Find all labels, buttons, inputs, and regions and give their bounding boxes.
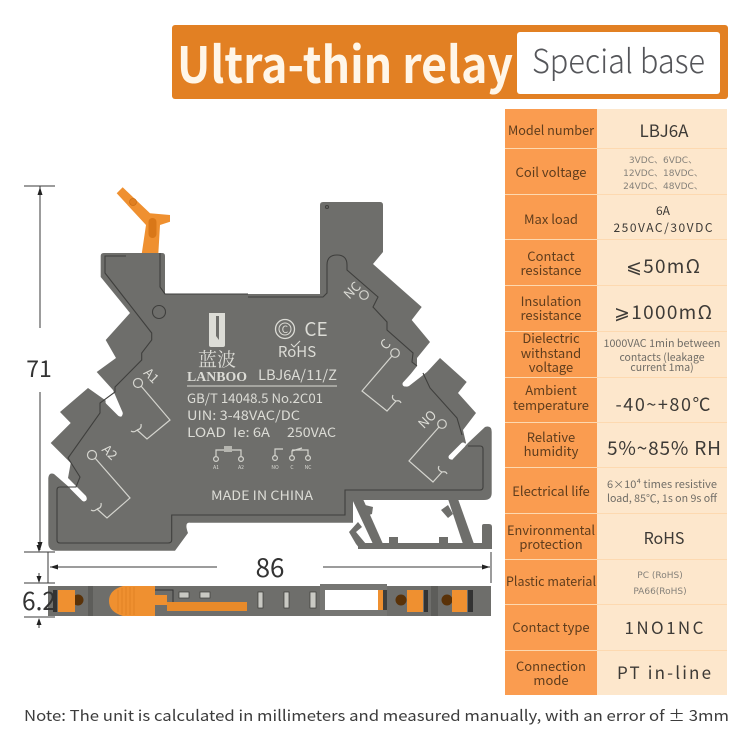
row: max load: Max load	[524, 209, 578, 228]
row: model number: LBJ6A	[640, 117, 689, 142]
brand logo	[187, 313, 247, 385]
made in china: MADE IN CHINA	[211, 485, 313, 504]
orange handle and slider	[109, 586, 247, 616]
contact wiring A1: A1	[140, 363, 164, 387]
dimension: height 71: 71	[26, 350, 52, 384]
subtitle box: Special base	[532, 35, 705, 83]
contact wiring A2	[88, 440, 130, 518]
title: Ultra-thin relay	[177, 26, 513, 98]
row: connection mode: Connection	[516, 656, 586, 675]
row: max load	[524, 202, 713, 236]
row: connection mode	[516, 656, 711, 689]
contact wiring A1	[131, 363, 170, 439]
row: contact resistance: ⩽50mΩ	[626, 252, 700, 279]
internal seam lines	[57, 206, 483, 543]
row: relative humidity: humidity	[524, 441, 579, 460]
coil schematic	[213, 446, 244, 471]
row: connection mode: mode	[533, 670, 569, 689]
row: insulation resistance: Insulation	[521, 291, 581, 310]
row: plastic material: PC (RoHS)	[637, 571, 683, 581]
row: model number	[508, 117, 689, 142]
row: environmental protection: Environmental	[507, 520, 595, 539]
right terminal 2	[442, 590, 473, 612]
dimension: thickness 6.2: 6.2	[22, 582, 56, 618]
row: contact type: Contact type	[512, 617, 590, 636]
certification marks	[276, 315, 328, 362]
row: contact resistance	[521, 246, 700, 279]
row: contact resistance: Contact	[527, 246, 575, 265]
contact schematic: NO	[271, 464, 279, 471]
row: model number: Model number	[508, 120, 595, 139]
header banner	[172, 25, 728, 99]
contact NO: NO	[413, 405, 440, 432]
contact wiring A2: A2	[98, 440, 122, 464]
row: dielectric withstand voltage: 1000VAC 1min between	[604, 336, 720, 351]
footnote: Note: The unit is calculated in millimeters and measured manually, with an error of ± 3mm	[24, 705, 729, 726]
row: dielectric withstand voltage	[521, 328, 720, 376]
row: plastic material: PA66(RoHS)	[633, 587, 687, 597]
certification marks: CE	[304, 315, 328, 342]
right terminal 1	[396, 590, 428, 612]
contact schematic: C	[290, 464, 294, 471]
row: insulation resistance: resistance	[521, 305, 581, 324]
certification marks: RoHS	[278, 341, 316, 362]
specification text: UIN: 3-48VAC/DC	[187, 405, 300, 424]
label window	[320, 584, 387, 616]
row: dielectric withstand voltage: Dielectric	[522, 328, 580, 347]
specification text: GB/T 14048.5 No.2C01	[187, 388, 323, 407]
row: electrical life: 6×10⁴ times resistive	[607, 477, 717, 492]
row: max load: 250VAC/30VDC	[614, 219, 713, 236]
row: ambient temperature: -40~+80℃	[616, 391, 710, 417]
row: dielectric withstand voltage: voltage	[529, 357, 573, 376]
contact C	[362, 334, 401, 411]
row: dielectric withstand voltage: contacts (leakage	[619, 350, 705, 365]
row: ambient temperature	[513, 380, 710, 417]
base body	[48, 202, 492, 551]
model number marking: LBJ6A/11/Z	[258, 365, 337, 385]
coil schematic: A1	[213, 464, 219, 471]
row: coil voltage: 24VDC、48VDC、	[623, 182, 703, 192]
contact NC: NC	[339, 277, 365, 303]
row: insulation resistance: ⩾1000mΩ	[614, 298, 712, 325]
row: electrical life	[512, 477, 718, 506]
relay base top view strip	[48, 584, 491, 616]
row: plastic material: Plastic material	[506, 571, 596, 590]
left terminal	[53, 590, 84, 612]
row: relative humidity: Relative	[527, 427, 575, 446]
row: plastic material	[506, 571, 687, 597]
underline	[187, 385, 337, 387]
small windows	[179, 592, 316, 608]
dimension: thickness 6.2	[22, 545, 56, 628]
row: coil voltage: Coil voltage	[516, 162, 586, 181]
contact schematic: NC	[305, 464, 311, 471]
specification text: Ie: 6A	[233, 422, 270, 441]
brand logo: 蓝波	[198, 345, 236, 372]
specification table	[505, 109, 727, 695]
orange release lever	[117, 187, 170, 254]
row: contact type: 1NO1NC	[624, 614, 704, 639]
row: environmental protection: RoHS	[644, 525, 684, 549]
dimension: width 86	[48, 548, 491, 585]
row: electrical life: Electrical life	[512, 481, 590, 500]
specification text: 250VAC	[287, 422, 336, 441]
din rail foot	[349, 499, 492, 549]
row: ambient temperature: temperature	[513, 395, 589, 414]
relay base side view	[48, 202, 492, 551]
certification marks: C	[282, 321, 289, 336]
contact C: C	[375, 334, 394, 353]
row: ambient temperature: Ambient	[525, 380, 577, 399]
coil schematic: A2	[238, 464, 244, 471]
specification text: LOAD	[187, 422, 226, 441]
contact NO	[409, 405, 447, 482]
row: contact type	[512, 614, 704, 639]
row: electrical life: load, 85℃, 1s on 9s off	[607, 491, 718, 506]
row: max load: 6A	[656, 202, 671, 219]
dimension: width 86: 86	[256, 548, 284, 585]
row: relative humidity	[524, 427, 721, 461]
brand logo: LANBOO	[187, 370, 247, 385]
row: coil voltage: 12VDC、18VDC、	[623, 169, 703, 179]
row: connection mode: PT in-line	[617, 659, 711, 684]
row: environmental protection: protection	[519, 534, 583, 553]
row: relative humidity: 5%~85% RH	[607, 434, 721, 461]
row: coil voltage	[516, 156, 703, 192]
row: coil voltage: 3VDC、6VDC、	[629, 156, 697, 166]
white slots	[72, 372, 463, 499]
row: dielectric withstand voltage: withstand	[521, 343, 581, 362]
row: dielectric withstand voltage: current 1ma)	[630, 360, 694, 375]
row: contact resistance: resistance	[521, 260, 581, 279]
row: environmental protection	[507, 520, 684, 553]
contact schematic	[271, 448, 311, 471]
specification text	[187, 388, 336, 441]
row: insulation resistance	[521, 291, 712, 325]
dimension: height 71	[24, 186, 55, 550]
